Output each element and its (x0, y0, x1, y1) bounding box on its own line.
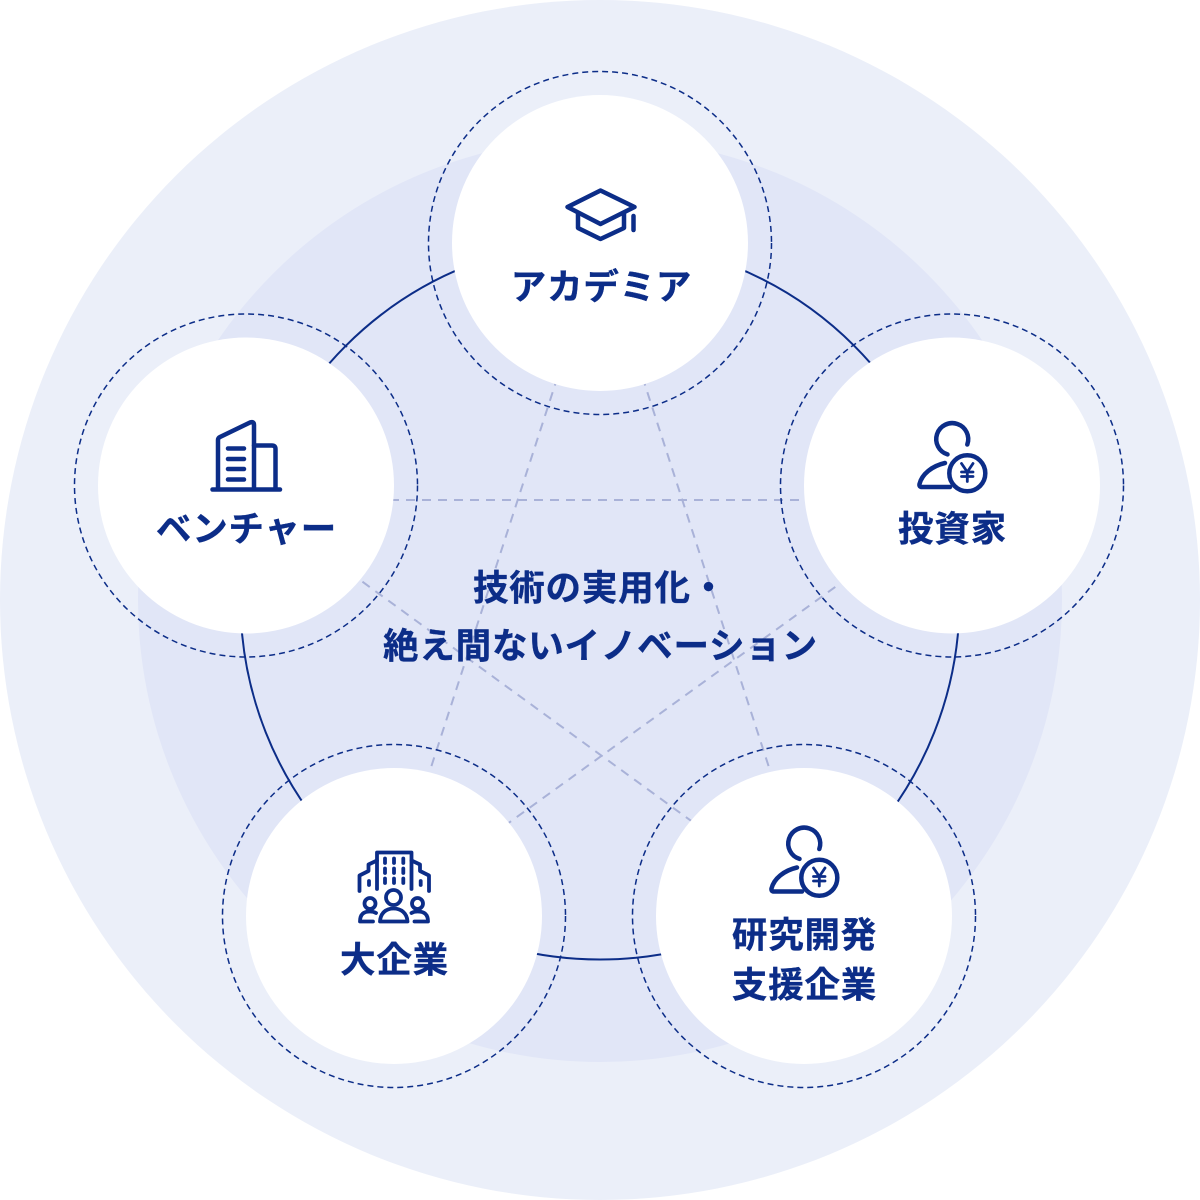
dashed ring: venture (74, 314, 418, 657)
node: 投資家 (780, 314, 1124, 657)
label: large companies: 大企業 (340, 940, 449, 980)
label: venture: ベンチャー (156, 509, 337, 549)
label: R&D support companies: 支援企業 (732, 965, 877, 1005)
white disc: academia (452, 95, 748, 391)
icon: graduation cap (568, 190, 634, 239)
label: academia: アカデミア (511, 267, 692, 307)
solid connecting circle (240, 240, 960, 960)
label: investors: 投資家 (898, 509, 1007, 549)
white disc: large companies (246, 768, 542, 1064)
label: R&D support companies: 研究開発 (732, 915, 877, 955)
dashed ring: R&D support companies (632, 744, 976, 1088)
icon: person with yen coin (771, 828, 837, 896)
white disc: venture (98, 338, 394, 634)
node: アカデミア (428, 72, 772, 414)
node: ベンチャー (74, 314, 418, 657)
white disc: investors (804, 338, 1100, 634)
node: 研究開発支援企業 (632, 744, 976, 1088)
center text: 技術の実用化・ (473, 568, 727, 608)
dashed ring: investors (780, 314, 1124, 657)
icon: person with yen coin (919, 423, 985, 491)
node: 大企業 (222, 744, 566, 1088)
dashed ring: academia (428, 72, 772, 414)
inner background circle (138, 138, 1062, 1062)
white disc: R&D support companies (656, 768, 952, 1064)
icon: buildings and people (360, 852, 429, 922)
center text: 絶え間ないイノベーション (383, 626, 818, 666)
dashed ring: large companies (222, 744, 566, 1088)
pentagram of dashed connecting lines (246, 240, 952, 906)
label: R&D support companies (732, 915, 877, 1005)
center text (383, 568, 818, 666)
icon: office building (212, 422, 280, 490)
